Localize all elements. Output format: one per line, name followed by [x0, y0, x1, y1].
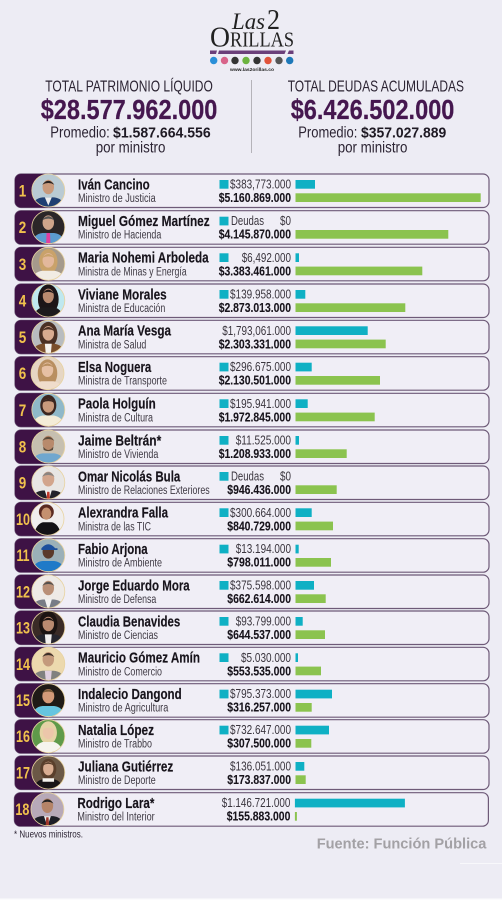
row 2: Miguel Gómez Martínez: $4.145.870.000: [219, 227, 291, 242]
summary: total patrimonio líquido: TOTAL PATRIMONIO LÍQUIDO: [45, 77, 213, 96]
row 15: Indalecio Dangond: $316.257.000: [227, 700, 291, 715]
row 12: Jorge Eduardo Mora: $375.598.000: [230, 578, 291, 592]
row 11: Fabio Arjona: Fabio Arjona: [78, 541, 148, 558]
row 18: Rodrigo Lara: 18: [15, 800, 29, 819]
row 12: Jorge Eduardo Mora: 12: [16, 582, 30, 602]
row 17: Juliana Gutiérrez: Juliana Gutiérrez: [78, 758, 173, 775]
row 7: Paola Holguín: $1.972.845.000: [219, 409, 291, 424]
row 6: Elsa Noguera: Elsa Noguera: [78, 359, 152, 376]
row 18: Rodrigo Lara: Ministro del Interior: [77, 812, 155, 824]
row 6: Elsa Noguera: $2.130.501.000: [219, 373, 291, 388]
row 9: Omar Nicolás Bula: Deudas: [231, 468, 264, 484]
row 14: Mauricio Gómez Amín: Ministro de Comercio: [78, 666, 162, 678]
row 6: Elsa Noguera: 6: [19, 364, 26, 383]
row 7: Paola Holguín: 7: [19, 401, 26, 420]
row 13: Claudia Benavides: [15, 611, 489, 647]
summary: total deudas acumuladas: Promedio:: [298, 125, 357, 142]
row 13: Claudia Benavides: $644.537.000: [227, 627, 291, 642]
summary: total deudas acumuladas: $6.426.502.000: [291, 94, 454, 125]
row 17: Juliana Gutiérrez: [15, 756, 489, 792]
row 4: Viviane Morales: $139.958.000: [230, 286, 291, 302]
row 8: Jaime Beltrán: Jaime Beltrán*: [78, 432, 161, 449]
logo: Las2Orillas: Las: [231, 9, 265, 34]
avatar: [31, 502, 64, 538]
row 2: Miguel Gómez Martínez: Ministro de Hacienda: [78, 230, 162, 242]
logo: Las2Orillas: RILLAS: [230, 27, 294, 51]
row 1: Iván Cancino: $5.160.869.000: [219, 190, 291, 205]
row 3: Maria Nohemi Arboleda: $6,492.000: [242, 250, 291, 265]
row 1: Iván Cancino: [15, 174, 489, 210]
avatar: [31, 430, 66, 466]
row 16: Natalia López: $732.647.000: [230, 722, 291, 737]
avatar: [32, 284, 65, 320]
row 7: Paola Holguín: [15, 393, 489, 429]
row 9: Omar Nicolás Bula: Omar Nicolás Bula: [78, 468, 181, 485]
row 16: Natalia López: [15, 720, 489, 756]
source credit: Fuente: Función Pública: [317, 836, 487, 853]
row 5: Ana María Vesga: [15, 320, 489, 356]
row 7: Paola Holguín: Paola Holguín: [78, 396, 156, 413]
row 8: Jaime Beltrán: $11.525.000: [236, 432, 291, 448]
avatar: [31, 357, 64, 393]
row 17: Juliana Gutiérrez: $136.051.000: [230, 758, 291, 774]
row 2: Miguel Gómez Martínez: 2: [19, 218, 26, 237]
row 3: Maria Nohemi Arboleda: Ministra de Minas y Energía: [78, 266, 187, 278]
row 2: Miguel Gómez Martínez: [15, 211, 489, 247]
row 12: Jorge Eduardo Mora: [15, 575, 489, 611]
avatar: [31, 575, 66, 611]
row 13: Claudia Benavides: $93.799.000: [236, 614, 291, 628]
avatar: [31, 611, 66, 647]
row 16: Natalia López: 16: [16, 727, 30, 746]
row 10: Alexrandra Falla: $840.729.000: [227, 518, 291, 533]
row 11: Fabio Arjona: $798.011.000: [227, 555, 291, 570]
summary: total deudas acumuladas: $357.027.889: [361, 125, 446, 142]
row 8: Jaime Beltrán: 8: [19, 438, 26, 456]
row 4: Viviane Morales: 4: [19, 292, 27, 310]
summary: total deudas acumuladas: por ministro: [338, 140, 407, 157]
row 17: Juliana Gutiérrez: $173.837.000: [227, 772, 291, 787]
row 2: Miguel Gómez Martínez: Deudas: [231, 213, 264, 228]
avatar: [31, 174, 66, 210]
row 11: Fabio Arjona: $13.194.000: [236, 541, 291, 556]
avatar: [32, 720, 65, 756]
row 18: Rodrigo Lara: $155.883.000: [227, 809, 290, 824]
row 14: Mauricio Gómez Amín: 14: [16, 655, 30, 674]
row 15: Indalecio Dangond: Indalecio Dangond: [78, 686, 182, 703]
row 10: Alexrandra Falla: 10: [16, 510, 30, 529]
avatar: [31, 684, 66, 720]
row 9: Omar Nicolás Bula: $946.436.000: [227, 482, 291, 497]
summary: total deudas acumuladas: [288, 79, 464, 157]
row 16: Natalia López: $307.500.000: [227, 736, 291, 751]
avatar: [30, 793, 65, 829]
row 17: Juliana Gutiérrez: Ministro de Deporte: [78, 775, 156, 787]
row 12: Jorge Eduardo Mora: Jorge Eduardo Mora: [78, 577, 190, 594]
row 8: Jaime Beltrán: Ministro de Vivienda: [78, 449, 159, 461]
row 1: Iván Cancino: 1: [19, 182, 26, 200]
row 11: Fabio Arjona: 11: [16, 546, 30, 565]
row 5: Ana María Vesga: Ministra de Salud: [78, 339, 146, 351]
logo: Las2Orillas: www.las2orillas.co: [229, 67, 274, 72]
row 12: Jorge Eduardo Mora: Ministro de Defensa: [78, 594, 157, 606]
row 10: Alexrandra Falla: [15, 502, 489, 538]
row 1: Iván Cancino: $383,773.000: [230, 176, 291, 192]
row 3: Maria Nohemi Arboleda: Maria Nohemi Arboleda: [78, 250, 209, 267]
row 6: Elsa Noguera: $296.675.000: [230, 359, 291, 374]
logo: Las2Orillas: 2: [267, 4, 280, 36]
row 10: Alexrandra Falla: $300.664.000: [230, 505, 291, 520]
row 10: Alexrandra Falla: Alexrandra Falla: [78, 505, 169, 522]
avatar: [31, 211, 66, 247]
avatar: [31, 466, 66, 502]
row 8: Jaime Beltrán: [15, 430, 489, 466]
avatar: [31, 539, 66, 575]
row 7: Paola Holguín: $195.941.000: [230, 396, 291, 411]
avatar: [31, 647, 66, 683]
row 18: Rodrigo Lara: $1.146.721.000: [222, 795, 290, 810]
row 1: Iván Cancino: Iván Cancino: [78, 176, 150, 193]
row 8: Jaime Beltrán: $1.208.933.000: [219, 446, 291, 461]
row 5: Ana María Vesga: $2.303.331.000: [219, 336, 291, 351]
row 16: Natalia López: Natalia López: [78, 722, 154, 739]
row 9: Omar Nicolás Bula: Ministro de Relaciones Exteriores: [78, 485, 210, 497]
row 3: Maria Nohemi Arboleda: $3.383.461.000: [219, 263, 291, 278]
row 3: Maria Nohemi Arboleda: [15, 247, 489, 283]
row 5: Ana María Vesga: 5: [19, 328, 26, 347]
row 4: Viviane Morales: Ministra de Educación: [78, 303, 165, 315]
row 14: Mauricio Gómez Amín: $553.535.000: [227, 663, 291, 678]
row 14: Mauricio Gómez Amín: $5.030.000: [241, 650, 291, 665]
row 16: Natalia López: Ministro de Trabbo: [78, 739, 152, 751]
row 15: Indalecio Dangond: Ministro de Agricultura: [78, 703, 169, 715]
row 11: Fabio Arjona: [15, 539, 489, 575]
row 2: Miguel Gómez Martínez: Miguel Gómez Martínez: [78, 213, 210, 230]
row 15: Indalecio Dangond: [15, 684, 489, 720]
row 14: Mauricio Gómez Amín: Mauricio Gómez Amín: [78, 650, 200, 667]
summary: total patrimonio líquido: $1.587.664.556: [113, 125, 211, 142]
summary: total patrimonio líquido: por ministro: [96, 140, 165, 157]
summary: total patrimonio líquido: [41, 77, 217, 157]
row 12: Jorge Eduardo Mora: $662.614.000: [227, 591, 291, 606]
footnote: * Nuevos ministros.: [14, 829, 83, 841]
row 4: Viviane Morales: [15, 284, 489, 320]
row 15: Indalecio Dangond: 15: [16, 691, 30, 710]
summary: total patrimonio líquido: Promedio:: [50, 125, 110, 142]
row 15: Indalecio Dangond: $795.373.000: [230, 686, 291, 701]
avatar: [32, 756, 65, 792]
row 13: Claudia Benavides: Ministro de Ciencias: [78, 630, 158, 642]
avatar: [31, 393, 66, 429]
logo: Las2Orillas: [210, 4, 294, 72]
row 2: Miguel Gómez Martínez: $0: [280, 213, 291, 228]
avatar: [31, 320, 66, 356]
row 6: Elsa Noguera: [15, 357, 489, 393]
logo: Las2Orillas: O: [210, 21, 230, 53]
row 13: Claudia Benavides: 13: [16, 618, 30, 638]
row 4: Viviane Morales: Viviane Morales: [78, 286, 167, 303]
row 5: Ana María Vesga: $1,793,061.000: [222, 323, 291, 338]
row 10: Alexrandra Falla: Ministra de las TIC: [78, 521, 151, 533]
row 3: Maria Nohemi Arboleda: 3: [19, 255, 26, 274]
row 13: Claudia Benavides: Claudia Benavides: [78, 613, 180, 630]
row 6: Elsa Noguera: Ministra de Transporte: [78, 376, 167, 388]
summary: total patrimonio líquido: $28.577.962.000: [41, 94, 217, 125]
row 7: Paola Holguín: Ministra de Cultura: [78, 412, 153, 424]
row 14: Mauricio Gómez Amín: [15, 647, 489, 683]
row 18: Rodrigo Lara: [14, 793, 488, 829]
row 1: Iván Cancino: Ministro de Justicia: [78, 193, 156, 205]
row 11: Fabio Arjona: Ministro de Ambiente: [78, 558, 162, 570]
row 9: Omar Nicolás Bula: 9: [19, 474, 26, 492]
row 9: Omar Nicolás Bula: [15, 466, 489, 502]
row 4: Viviane Morales: $2.873.013.000: [219, 300, 291, 315]
row 18: Rodrigo Lara: Rodrigo Lara*: [77, 795, 155, 812]
row 17: Juliana Gutiérrez: 17: [16, 764, 30, 782]
row 5: Ana María Vesga: Ana María Vesga: [78, 323, 172, 340]
avatar: [31, 247, 66, 283]
row 9: Omar Nicolás Bula: $0: [280, 468, 291, 484]
